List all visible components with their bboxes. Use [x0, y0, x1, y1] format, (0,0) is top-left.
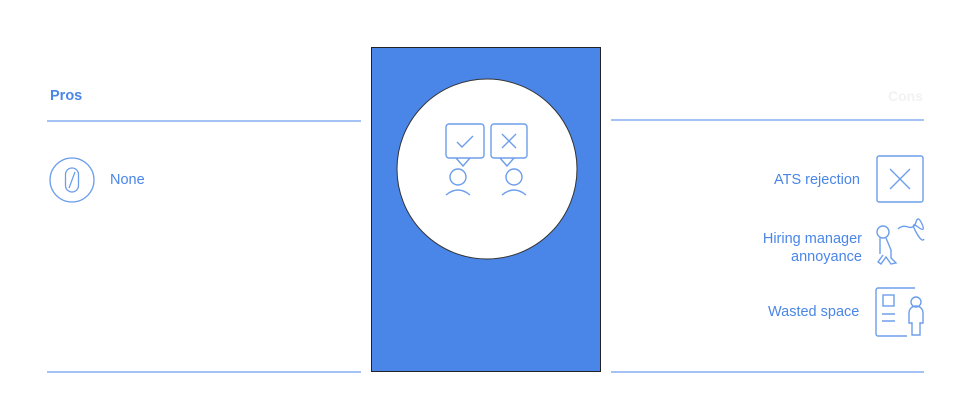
item: ATS rejection: ATS rejection	[774, 172, 860, 188]
heading: Pros: Pros	[50, 88, 82, 104]
icon: resume person	[875, 287, 924, 337]
item: Wasted space: Wasted space	[768, 304, 859, 320]
icon: annoyed person	[876, 218, 924, 265]
icon: none	[49, 157, 95, 203]
circle with icon	[396, 78, 578, 260]
heading: Cons: Cons	[888, 88, 923, 104]
item: Hiring manager annoyance: Hiring manager annoyance	[763, 231, 862, 265]
text: None: None	[110, 172, 145, 188]
icon: X box	[876, 155, 924, 203]
center panel	[371, 47, 601, 372]
